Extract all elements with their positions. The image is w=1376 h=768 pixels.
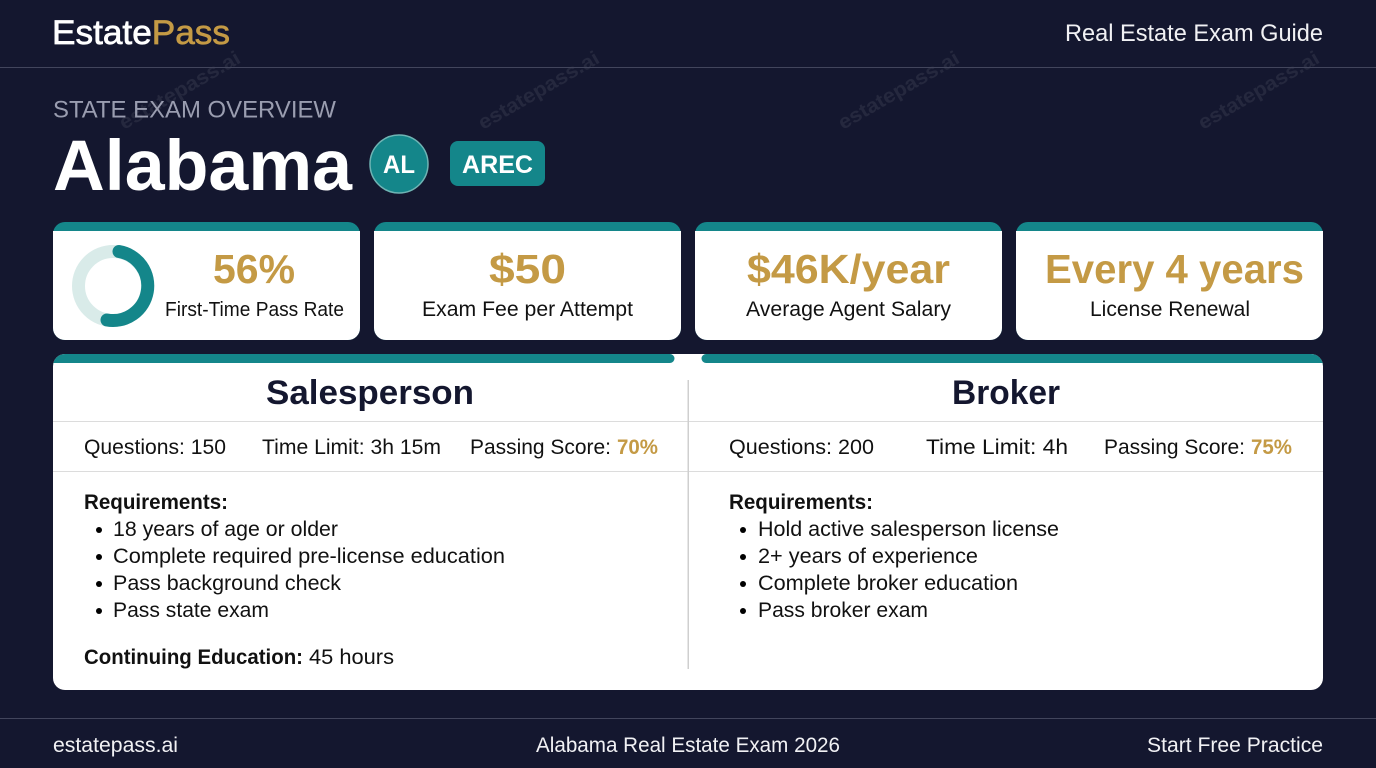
broker requirements: Pass broker exam: [758, 598, 928, 622]
salesperson requirements: Pass background check: [113, 571, 341, 595]
stat card: pass rate: 56%: [213, 246, 295, 292]
stat card: salary: [695, 222, 1002, 340]
broker exam facts: [729, 435, 1292, 459]
agency badge: AREC: [462, 151, 533, 179]
broker column: [729, 374, 1292, 622]
broker requirements: Requirements:: [729, 490, 873, 514]
stat card: exam fee: [374, 222, 681, 340]
stat card: exam fee: $50: [489, 246, 566, 292]
salesperson requirements: [84, 490, 505, 622]
broker exam facts: Questions: 200: [729, 435, 874, 459]
panel: license comparison: [53, 354, 1323, 690]
stat card: pass rate: [53, 222, 360, 340]
header subtitle: Real Estate Exam Guide: [1065, 20, 1323, 47]
broker requirements: Hold active salesperson license: [758, 517, 1059, 541]
broker requirements: [729, 490, 1059, 622]
broker exam facts: Time Limit: 4h: [926, 435, 1068, 459]
stat card: exam fee: Exam Fee per Attempt: [422, 297, 633, 321]
stat card: salary: $46K/year: [747, 246, 950, 292]
salesperson exam facts: [84, 435, 658, 459]
salesperson heading: Salesperson: [266, 374, 474, 412]
footer: [0, 718, 1376, 757]
stat card: renewal: License Renewal: [1090, 297, 1250, 321]
donut chart: [78, 252, 148, 321]
stat card: renewal: [1016, 222, 1323, 340]
broker exam facts: 75%: [1251, 435, 1292, 459]
stat card: pass rate: First-Time Pass Rate: [165, 299, 344, 321]
state badge: AL: [383, 151, 415, 179]
title: Alabama: [53, 127, 353, 206]
salesperson column: [84, 374, 658, 669]
salesperson exam facts: Questions: 150: [84, 435, 226, 459]
salesperson exam facts: Passing Score:: [470, 435, 611, 459]
broker requirements: Complete broker education: [758, 571, 1018, 595]
continuing education: Continuing Education:: [84, 645, 303, 669]
agency badge: [450, 141, 545, 186]
text: estatepass.ai: [474, 47, 603, 134]
salesperson exam facts: 70%: [617, 435, 658, 459]
eyebrow heading: STATE EXAM OVERVIEW: [53, 96, 336, 124]
text: estatepass.ai: [116, 47, 244, 134]
stat card: renewal: Every 4 years: [1045, 246, 1304, 292]
text: estatepass.ai: [834, 47, 963, 134]
salesperson exam facts: Time Limit: 3h 15m: [262, 435, 441, 459]
state badge: [370, 135, 428, 193]
continuing education: 45 hours: [309, 645, 394, 669]
broker exam facts: Passing Score:: [1104, 435, 1245, 459]
footer center title: Alabama Real Estate Exam 2026: [536, 734, 840, 757]
salesperson requirements: Pass state exam: [113, 598, 269, 622]
broker requirements: 2+ years of experience: [758, 544, 978, 568]
stat card: salary: Average Agent Salary: [746, 297, 951, 321]
salesperson requirements: Complete required pre-license education: [113, 544, 505, 568]
footer site: estatepass.ai: [53, 734, 178, 757]
salesperson requirements: Requirements:: [84, 490, 228, 514]
logo: EstatePass: [52, 14, 230, 52]
text: estatepass.ai: [1194, 47, 1323, 134]
salesperson requirements: 18 years of age or older: [113, 517, 338, 541]
header: [0, 14, 1376, 68]
broker heading: Broker: [952, 374, 1060, 412]
footer call to action: Start Free Practice: [1147, 734, 1323, 757]
